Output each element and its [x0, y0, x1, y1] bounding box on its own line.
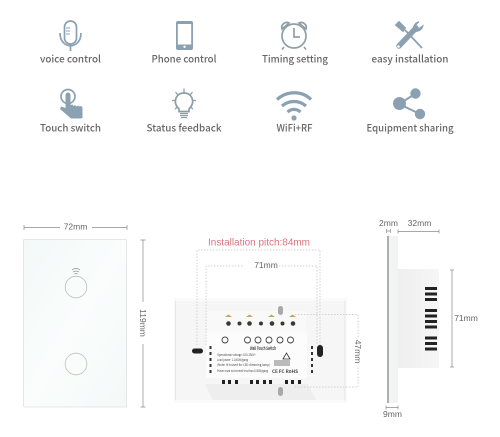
- width dimension 72mm: 72mm: [64, 222, 87, 232]
- top touch button: [65, 276, 87, 298]
- 71mm height dimension: [450, 270, 478, 367]
- feature: equipment sharing: Equipment sharing: [366, 120, 454, 134]
- 71mm dimension: 71mm: [254, 260, 278, 270]
- height dimension 119mm: 119mm: [138, 309, 148, 337]
- 71mm height dimension: 71mm: [454, 313, 478, 323]
- product label text: Operational voltage: 100-250V~: [217, 353, 256, 357]
- feature: timing setting: Timing setting: [262, 50, 328, 66]
- indicator wifi icon: [72, 268, 80, 274]
- pitch label: Installation pitch:84mm: [208, 236, 310, 248]
- feature: voice control: [40, 21, 101, 66]
- 32mm dimension: 32mm: [408, 218, 431, 228]
- switch body: [398, 269, 439, 368]
- 47mm dimension: 47mm: [353, 340, 363, 363]
- product label text: Wall Touch Switch: [250, 345, 276, 352]
- feature: phone control: Phone control: [152, 50, 217, 66]
- feature: status feedback: Status feedback: [146, 120, 222, 134]
- panel: side view of switch: [379, 218, 478, 419]
- 2mm dimension: [379, 218, 398, 233]
- 32mm dimension: [398, 218, 439, 234]
- width dimension 72mm: [24, 222, 127, 232]
- feature: phone control: [152, 21, 217, 66]
- feature: status feedback: [146, 88, 222, 134]
- 9mm dimension: 9mm: [383, 409, 402, 419]
- product label text: Power must not exceed less than 1000W/gang: [217, 369, 268, 373]
- panel: rear view of switch: [174, 236, 363, 403]
- bottom pins: [222, 380, 301, 384]
- frame: [389, 236, 398, 403]
- glass plate edge: [387, 236, 389, 403]
- terminal labels: [222, 337, 294, 343]
- side pins: [210, 346, 313, 373]
- bottom touch button: [65, 353, 87, 375]
- product label text: [217, 345, 298, 375]
- feature: WiFi+RF: [276, 93, 313, 134]
- feature: voice control: voice control: [40, 50, 101, 66]
- product label text: Load power: 1-1000W/gang: [217, 358, 248, 362]
- back plate: [174, 298, 347, 403]
- front glass plate: [24, 240, 126, 407]
- feature: timing setting: [262, 22, 328, 66]
- panel: feature icons: [40, 21, 454, 134]
- 71mm dimension: [206, 260, 317, 345]
- height dimension 119mm: [138, 240, 148, 407]
- pitch dimension lines: [197, 250, 320, 345]
- 2mm dimension: 2mm: [379, 218, 398, 228]
- feature: touch switch: [40, 90, 101, 134]
- vent slots: [425, 287, 437, 350]
- feature: equipment sharing: [366, 88, 454, 134]
- product label text: CE FC RoHS: [272, 369, 298, 375]
- mounting slots: [192, 306, 323, 396]
- top terminals: [225, 314, 296, 326]
- product label text: (Note: It is used for LED dimming lamp): [217, 363, 270, 367]
- feature: touch switch: Touch switch: [40, 120, 101, 134]
- feature: easy installation: [372, 22, 448, 66]
- 47mm dimension: [295, 314, 363, 387]
- feature: WiFi+RF: WiFi+RF: [276, 120, 313, 134]
- panel: front view of switch: [24, 222, 148, 407]
- feature: easy installation: easy installation: [372, 50, 448, 66]
